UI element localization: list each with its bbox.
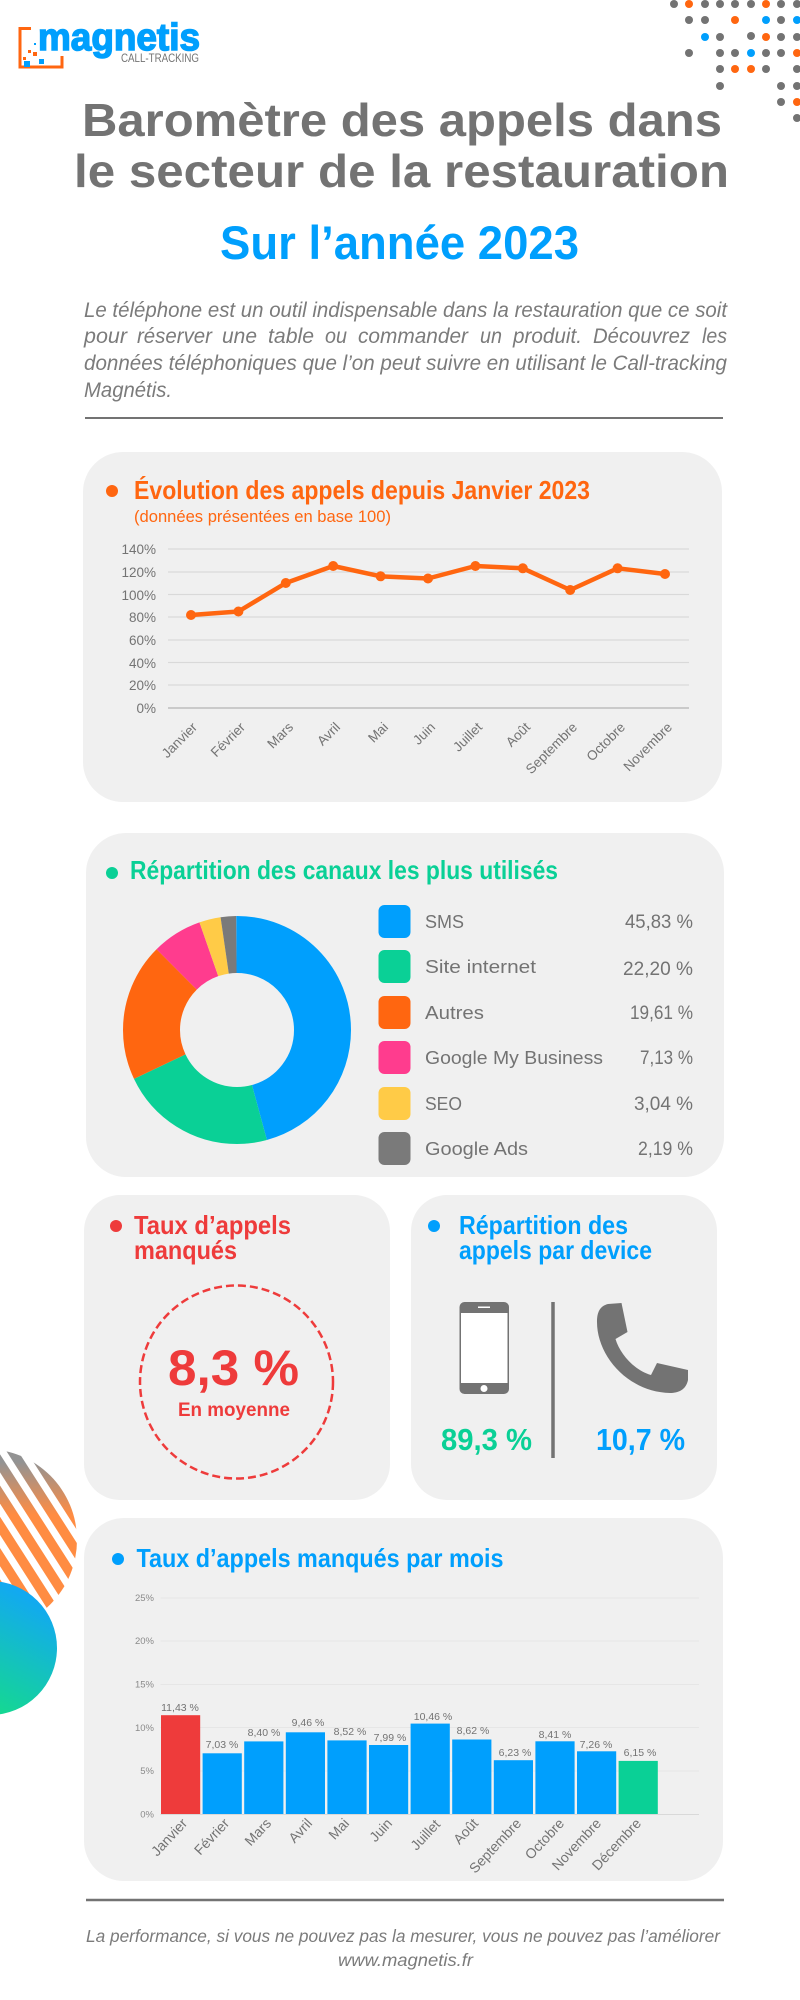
dashed circle stat: En moyenne (178, 1400, 290, 1421)
line chart: Mai (365, 720, 391, 746)
dashed circle stat (140, 1286, 333, 1478)
line chart: 120% (121, 565, 156, 580)
line chart: Juillet (450, 719, 485, 755)
heading: Évolution des appels depuis Janvier 2023 (134, 475, 590, 505)
heading: Répartition des canaux les plus utilisés (130, 855, 558, 885)
bar chart: 11,43 % (161, 1702, 199, 1714)
heading: Taux d’appels (134, 1210, 291, 1240)
line chart: Février (208, 719, 248, 760)
bar chart: 6,23 % (499, 1747, 531, 1759)
bar chart: 5% (140, 1766, 155, 1777)
panel: taux d'appels manqués par mois (84, 1518, 723, 1881)
legend: SEO (425, 1094, 462, 1114)
line chart: 20% (129, 678, 156, 693)
bar chart: 9,46 % (292, 1717, 324, 1729)
bar chart: 10,46 % (414, 1711, 452, 1723)
bar chart: 6,15 % (624, 1747, 656, 1759)
legend: 45,83 % (625, 912, 693, 933)
line chart: 40% (129, 656, 156, 671)
intro paragraph: produit. (512, 324, 582, 348)
sub-heading: (données présentées en base 100) (134, 507, 391, 526)
bar chart: Octobre (522, 1815, 567, 1862)
line chart: 80% (129, 610, 156, 625)
legend (378, 905, 693, 1165)
line chart: Avril (314, 720, 343, 749)
heading: appels par device (459, 1235, 652, 1265)
icon: handset (597, 1303, 688, 1393)
legend: Google Ads (425, 1139, 528, 1159)
footer text: La performance, si vous ne pouvez pas la mesurer, vous ne pouvez pas l’améliorer (86, 1926, 721, 1946)
line chart: 60% (129, 633, 156, 648)
title: Baromètre des appels dans (82, 94, 722, 146)
panel: évolution des appels (83, 452, 722, 802)
decorative striped circle (0, 1451, 77, 1608)
legend: 7,13 % (640, 1048, 693, 1069)
bar chart: Février (191, 1815, 232, 1858)
logo: magnetis call-tracking: magnetis (38, 17, 200, 59)
intro paragraph: les (702, 324, 727, 348)
bar chart: Novembre (548, 1815, 604, 1873)
intro paragraph: Magnétis. (84, 378, 172, 402)
bar chart: 15% (135, 1680, 155, 1690)
intro paragraph: commander (358, 324, 469, 348)
legend: 3,04 % (634, 1094, 693, 1115)
line chart: Novembre (620, 720, 675, 774)
bar chart: Septembre (466, 1815, 524, 1876)
intro paragraph: Découvrez (593, 324, 690, 348)
bar chart: 8,40 % (248, 1727, 280, 1739)
legend: 2,19 % (638, 1139, 693, 1160)
footer text (86, 1926, 721, 1970)
bar chart: Juin (366, 1815, 395, 1845)
bar chart: Mars (241, 1815, 274, 1849)
bar chart: 8,62 % (457, 1725, 489, 1737)
legend: Site internet (425, 957, 536, 977)
bar chart (135, 1593, 699, 1876)
line chart: 140% (121, 542, 156, 557)
decorative gradient circle (0, 1581, 57, 1715)
bullet (428, 1220, 440, 1232)
bar chart: 8,52 % (334, 1726, 366, 1738)
bar chart: 20% (135, 1636, 155, 1647)
bar chart: 10% (135, 1723, 155, 1734)
line chart: 100% (121, 588, 156, 603)
bar chart: Mai (325, 1815, 352, 1843)
intro paragraph: une (222, 324, 257, 348)
bullet (106, 867, 118, 879)
line chart: Janvier (159, 719, 200, 761)
subtitle: Sur l’année 2023 (220, 216, 579, 269)
intro paragraph: réserver (137, 324, 213, 348)
heading: Répartition des (459, 1210, 628, 1240)
decorative dot grid (670, 0, 800, 122)
intro paragraph (83, 298, 728, 402)
donut chart (152, 944, 322, 1116)
legend: Google My Business (425, 1048, 603, 1068)
legend: Autres (425, 1003, 484, 1023)
stat: landline: 10,7 % (596, 1422, 685, 1457)
line chart: Septembre (523, 720, 580, 777)
intro paragraph: données téléphoniques que l’on peut suivre en utilisant le Call-tracking (84, 351, 727, 375)
line chart: Juin (410, 720, 438, 748)
icon: smartphone (460, 1302, 509, 1394)
intro paragraph: pour (83, 324, 128, 348)
intro paragraph: Le téléphone est un outil indispensable dans la restauration que ce soit (84, 298, 728, 322)
line chart (121, 542, 689, 777)
legend: 22,20 % (623, 959, 693, 980)
intro paragraph: ou (325, 324, 347, 348)
bar chart: 8,41 % (539, 1729, 571, 1741)
intro paragraph: table (268, 324, 314, 348)
heading (134, 1210, 291, 1265)
logo: magnetis call-tracking: CALL-TRACKING (121, 53, 199, 65)
dashed circle stat: 8,3 % (168, 1340, 299, 1396)
title (74, 94, 729, 197)
bar chart: 25% (135, 1593, 155, 1604)
panel: taux d'appels manqués (84, 1195, 390, 1500)
bar chart: 0% (140, 1810, 155, 1820)
intro paragraph: un (480, 324, 502, 348)
heading: Taux d’appels manqués par mois (136, 1543, 504, 1573)
bar chart: Janvier (148, 1815, 190, 1859)
stat: mobile: 89,3 % (441, 1422, 532, 1457)
line chart: Août (503, 719, 533, 750)
bullet (112, 1553, 124, 1565)
bar chart: Juillet (407, 1816, 443, 1853)
panel: répartition par device (411, 1195, 717, 1500)
line chart: Mars (264, 719, 296, 751)
heading (459, 1210, 652, 1265)
bar chart: Avril (285, 1815, 315, 1846)
legend: SMS (425, 912, 464, 932)
legend: 19,61 % (630, 1003, 693, 1024)
bar chart: Août (450, 1815, 481, 1847)
heading: manqués (134, 1235, 237, 1265)
panel: répartition des canaux (86, 833, 724, 1177)
bullet (106, 485, 118, 497)
bar chart: Décembre (588, 1815, 644, 1873)
title: le secteur de la restauration (74, 145, 729, 197)
line chart: 0% (136, 701, 156, 716)
bar chart: 7,26 % (580, 1739, 612, 1751)
bullet (110, 1220, 122, 1232)
line chart: Octobre (584, 720, 628, 764)
bar chart: 7,99 % (374, 1732, 406, 1744)
bar chart: 7,03 % (206, 1739, 238, 1751)
footer text: www.magnetis.fr (338, 1950, 474, 1970)
